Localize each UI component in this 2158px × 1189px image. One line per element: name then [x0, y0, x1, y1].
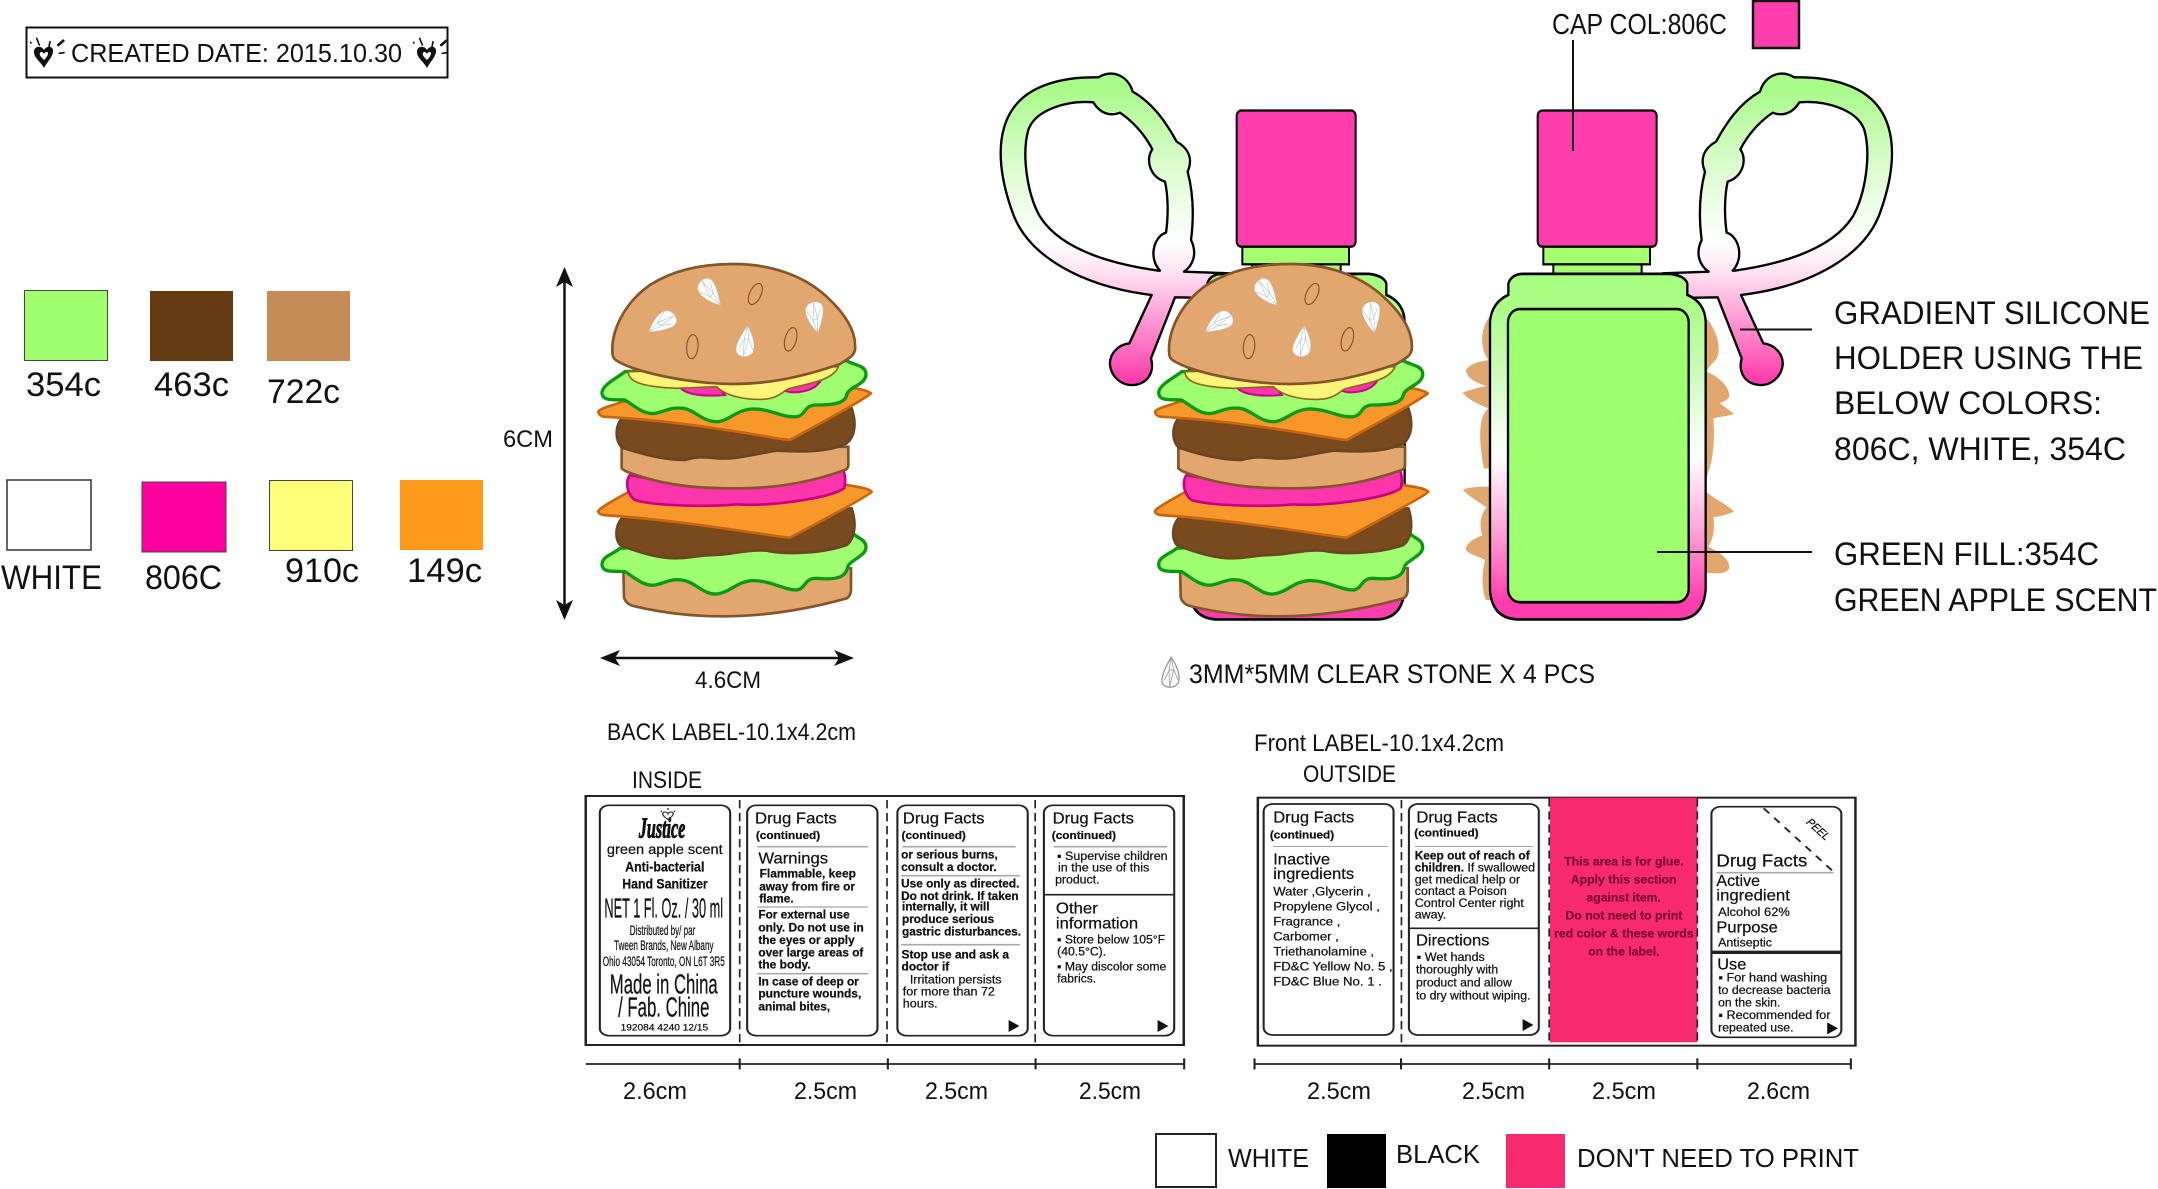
panel: inactive ingredients: FD&C Yellow No. 5 ,	[1273, 960, 1393, 973]
panel: active ingredient and use: Antiseptic	[1718, 936, 1772, 949]
panel: keep out of reach and directions: get medical help or	[1415, 873, 1521, 886]
back label heading: BACK LABEL-10.1x4.2cm	[607, 719, 856, 746]
panel: other information: information	[1056, 914, 1138, 932]
panel: active ingredient and use: Use	[1717, 955, 1746, 973]
glue area: red color & these words	[1554, 927, 1694, 940]
panel: brand: 192084 4240 12/15	[621, 1024, 709, 1033]
panel: inactive ingredients	[1264, 804, 1394, 1035]
front label heading: Front LABEL-10.1x4.2cm	[1254, 730, 1504, 757]
panel: active ingredient and use: to decrease bacteria	[1718, 983, 1831, 997]
back view bottle	[1490, 110, 1706, 619]
colour swatches: 354c	[26, 366, 101, 404]
panel: inactive ingredients: Drug Facts	[1273, 808, 1354, 826]
panel: warnings: (continued)	[756, 829, 820, 842]
back label heading: INSIDE	[632, 767, 702, 794]
panel: brand: Made in China	[610, 969, 718, 1000]
panel: brand: Hand Sanitizer	[622, 877, 708, 892]
dimension arrow: height 6CM	[503, 267, 573, 620]
panel: inactive ingredients: FD&C Blue No. 1 .	[1273, 975, 1382, 988]
created date box: CREATED DATE: 2015.10.30	[71, 40, 402, 68]
front label measurements: 2.5cm	[1462, 1078, 1525, 1105]
panel: brand: / Fab. Chine	[618, 992, 709, 1023]
gradient holder callout: GRADIENT SILICONE	[1834, 295, 2150, 331]
panel: keep out of reach and directions: If swallowed	[1467, 861, 1535, 874]
panel: other information: ▪ Store below 105°F	[1057, 933, 1165, 946]
panel: active ingredient and use	[1711, 807, 1841, 1037]
glue area: Apply this section	[1571, 873, 1677, 886]
panel: other information: Other	[1056, 899, 1098, 917]
cap colour callout: CAP COL:806C	[1552, 9, 1727, 41]
panel: warnings: Flammable, keep	[760, 867, 856, 880]
panel: directions: internally, it will	[902, 900, 990, 913]
gradient holder callout	[1740, 295, 2150, 467]
dimension arrow: height 6CM: 6CM	[503, 426, 553, 453]
panel: other information: Drug Facts	[1053, 809, 1134, 827]
panel: inactive ingredients: Inactive	[1273, 850, 1330, 868]
gradient holder callout: 806C, WHITE, 354C	[1834, 431, 2126, 467]
colour swatches	[1, 290, 483, 597]
panel: warnings: away from fire or	[759, 880, 855, 893]
panel: warnings: the eyes or apply	[758, 933, 855, 947]
glue area: Do not need to print	[1565, 909, 1683, 922]
panel: other information: (40.5°C).	[1057, 945, 1106, 958]
panel: directions: Drug Facts	[903, 809, 985, 827]
green fill callout	[1657, 536, 2157, 618]
colour swatches: 149c	[407, 552, 482, 590]
glue area: on the label.	[1588, 945, 1660, 958]
panel: active ingredient and use: on the skin.	[1718, 996, 1780, 1009]
colour swatches: 722c	[267, 373, 340, 411]
dimension arrow: width 4.6CM: 4.6CM	[695, 667, 761, 694]
panel: warnings: Drug Facts	[755, 809, 837, 827]
back label	[586, 796, 1185, 1069]
panel: other information: fabrics.	[1057, 972, 1096, 985]
panel: inactive ingredients: (continued)	[1270, 829, 1334, 841]
green fill callout: GREEN FILL:354C	[1834, 536, 2099, 572]
panel: directions: for more than 72	[903, 985, 995, 998]
panel: keep out of reach and directions: ▪ Wet hands	[1417, 950, 1485, 964]
panel: warnings: For external use	[758, 908, 850, 921]
panel: keep out of reach and directions: (continued)	[1414, 827, 1479, 839]
back label measurements	[623, 1078, 1141, 1105]
panel: active ingredient and use: ingredient	[1716, 886, 1790, 904]
back label measurements: 2.5cm	[1079, 1078, 1141, 1105]
panel: warnings: flame.	[759, 892, 794, 905]
right holder loop	[1663, 74, 1892, 385]
panel: keep out of reach and directions: away.	[1415, 908, 1446, 921]
panel: active ingredient and use: ▪ For hand washing	[1718, 971, 1827, 984]
print legend: WHITE	[1228, 1143, 1309, 1173]
created date box	[26, 28, 448, 78]
panel: inactive ingredients: ingredients	[1273, 865, 1354, 883]
front label measurements: 2.5cm	[1592, 1078, 1656, 1105]
dimension arrow: width 4.6CM	[600, 650, 854, 694]
print legend	[1156, 1134, 1859, 1188]
panel: inactive ingredients: Triethanolamine ,	[1273, 945, 1374, 958]
panel: other information: in the use of this	[1058, 861, 1150, 874]
panel: keep out of reach and directions	[1409, 804, 1539, 1035]
glue area	[1549, 798, 1697, 1045]
panel: directions: Stop use and ask a	[902, 948, 1010, 961]
panel: inactive ingredients: Fragrance ,	[1273, 915, 1340, 928]
panel: brand: Anti-bacterial	[625, 860, 704, 875]
panel: brand: green apple scent	[607, 842, 723, 858]
panel: directions	[897, 805, 1028, 1036]
print legend: BLACK	[1396, 1139, 1481, 1169]
panel: keep out of reach and directions: product and allow	[1416, 976, 1512, 989]
panel: warnings: puncture wounds,	[758, 987, 861, 1000]
glue area: against item.	[1587, 891, 1661, 904]
panel: directions: consult a doctor.	[901, 860, 997, 874]
front label heading: OUTSIDE	[1303, 761, 1396, 788]
panel: warnings: over large areas of	[758, 946, 864, 959]
panel: directions: doctor if	[902, 960, 950, 973]
colour swatches: 806C	[145, 559, 222, 597]
panel: active ingredient and use: Purpose	[1716, 918, 1778, 936]
panel: active ingredient and use: PEEL	[1803, 817, 1833, 842]
panel: keep out of reach and directions: contact a Poison	[1415, 884, 1507, 898]
panel: directions: gastric disturbances.	[902, 925, 1021, 938]
panel: active ingredient and use: Alcohol 62%	[1718, 905, 1790, 919]
clear stone note: 3MM*5MM CLEAR STONE X 4 PCS	[1189, 659, 1595, 689]
print legend: DON'T NEED TO PRINT	[1577, 1143, 1859, 1173]
panel: inactive ingredients: Water ,Glycerin ,	[1273, 885, 1371, 898]
front label heading	[1254, 730, 1504, 788]
panel: keep out of reach and directions: Control Center right	[1415, 896, 1524, 910]
front label measurements: 2.6cm	[1747, 1078, 1810, 1105]
burger silhouette behind bottle	[1463, 313, 1734, 600]
panel: brand: Distributed by/ par	[630, 923, 695, 939]
panel: brand	[600, 805, 730, 1036]
panel: other information	[1044, 805, 1174, 1036]
colour swatches: 910c	[285, 552, 359, 590]
panel: active ingredient and use: Active	[1716, 872, 1760, 890]
front label measurements	[1307, 1078, 1810, 1105]
panel: warnings: animal bites,	[758, 1000, 830, 1013]
panel: directions: Do not drink. If taken	[901, 889, 1019, 903]
panel: warnings: the body.	[758, 958, 811, 971]
panel: keep out of reach and directions: Directions	[1416, 931, 1489, 949]
panel: keep out of reach and directions: Drug Facts	[1416, 808, 1498, 826]
gradient holder callout: HOLDER USING THE	[1834, 340, 2143, 376]
front label	[1255, 798, 1855, 1069]
panel: inactive ingredients: Propylene Glycol ,	[1273, 900, 1380, 913]
panel: keep out of reach and directions: Keep out of reach of	[1415, 849, 1530, 862]
panel: active ingredient and use: repeated use.	[1718, 1021, 1794, 1034]
panel: other information: (continued)	[1052, 829, 1116, 842]
burger front view	[598, 264, 872, 616]
panel: active ingredient and use: Drug Facts	[1716, 852, 1807, 871]
panel: other information: ▪ Supervise children	[1057, 849, 1168, 863]
panel: other information: product.	[1055, 873, 1099, 886]
panel: warnings: only. Do not use in	[758, 921, 864, 934]
panel: directions: Irritation persists	[910, 973, 1002, 986]
back label measurements: 2.5cm	[925, 1078, 988, 1105]
panel: directions: Use only as directed.	[901, 877, 1019, 890]
panel: brand: Justice	[638, 812, 685, 844]
panel: warnings: Warnings	[758, 849, 828, 867]
panel: inactive ingredients: Carbomer ,	[1273, 930, 1339, 943]
back label measurements: 2.5cm	[794, 1078, 857, 1105]
panel: directions: produce serious	[902, 912, 994, 926]
back bottle behind burger	[1189, 110, 1405, 619]
burger on bottle	[1155, 264, 1428, 616]
panel: directions: or serious burns,	[901, 848, 998, 861]
panel: brand: Tween Brands, New Albany	[614, 938, 714, 954]
back label: NET 1 Fl. Oz. / 30 ml	[604, 892, 723, 924]
panel: directions: hours.	[903, 997, 938, 1010]
back label heading	[607, 719, 856, 794]
front label measurements: 2.5cm	[1307, 1078, 1371, 1105]
glue area: This area is for glue.	[1564, 855, 1684, 868]
colour swatches: WHITE	[1, 559, 102, 597]
gradient holder callout: BELOW COLORS:	[1834, 385, 2102, 421]
panel: keep out of reach and directions: to dry without wiping.	[1416, 989, 1531, 1002]
panel: keep out of reach and directions: thoroughly with	[1416, 963, 1498, 976]
left holder loop	[1001, 74, 1230, 385]
back label measurements: 2.6cm	[623, 1078, 687, 1105]
panel: warnings: In case of deep or	[758, 975, 859, 988]
panel: keep out of reach and directions: children.	[1415, 861, 1464, 874]
cap colour callout	[1552, 1, 1799, 151]
panel: active ingredient and use: ▪ Recommended for	[1718, 1008, 1831, 1022]
panel: directions: (continued)	[902, 829, 966, 842]
back label: Ohio 43054 Toronto, ON L6T 3R5	[603, 954, 725, 970]
panel: other information: ▪ May discolor some	[1057, 960, 1166, 973]
colour swatches: 463c	[154, 366, 229, 404]
panel: warnings	[747, 805, 877, 1036]
